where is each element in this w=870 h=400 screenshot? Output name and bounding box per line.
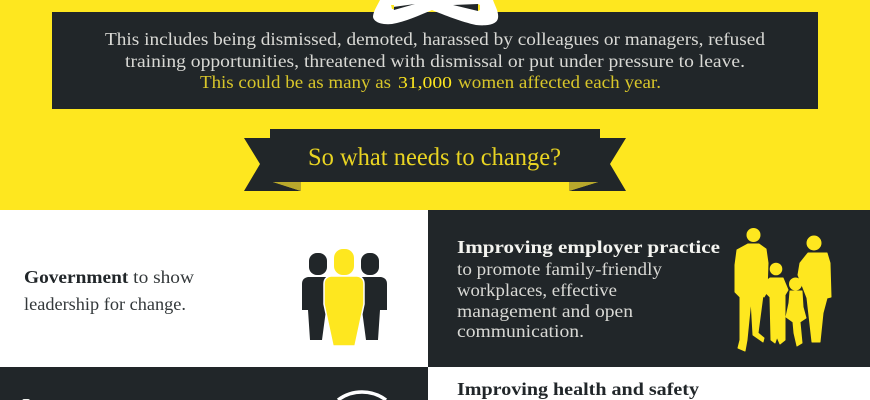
panel: bottom left dark [0,367,428,400]
text: employer practice: management and open [457,301,633,321]
text: government leadership [24,267,194,314]
icon: white ring [338,392,386,400]
text: employer practice [457,237,720,341]
text: employer practice: to promote family-friendly [457,259,662,279]
text: women affected statistic: women affected each year. [458,72,661,92]
text: employer practice: workplaces, effective [457,280,617,300]
text: women affected statistic: This could be as many as [200,72,391,92]
text: women affected statistic [200,72,661,92]
text: employer practice: communication. [457,321,584,341]
panel: dismissal information [52,0,818,109]
heading banner: so what needs to change [244,129,626,191]
text: health and safety heading: Improving health and safety [457,379,699,399]
icon: family silhouette [735,228,831,351]
text: behaviours list: training opportunities, threatened with dismissal or put under pressure to leave. [125,51,745,71]
text: behaviours list: This includes being dismissed, demoted, harassed by colleagues or managers, refused [105,29,765,49]
text: government leadership: Government to show [24,267,194,287]
text: government leadership: leadership for change. [24,294,186,314]
icon: white bow [373,0,498,25]
text: employer practice: Improving employer practice [457,237,720,257]
icon: three people [302,249,387,346]
panel: government [0,210,428,367]
panel: employer practice [428,210,870,367]
heading banner: so what needs to change: So what needs to change? [308,144,561,171]
panel: health and safety [428,367,870,400]
text: behaviours list [105,29,765,71]
text: women affected statistic: 31,000 [398,73,452,92]
